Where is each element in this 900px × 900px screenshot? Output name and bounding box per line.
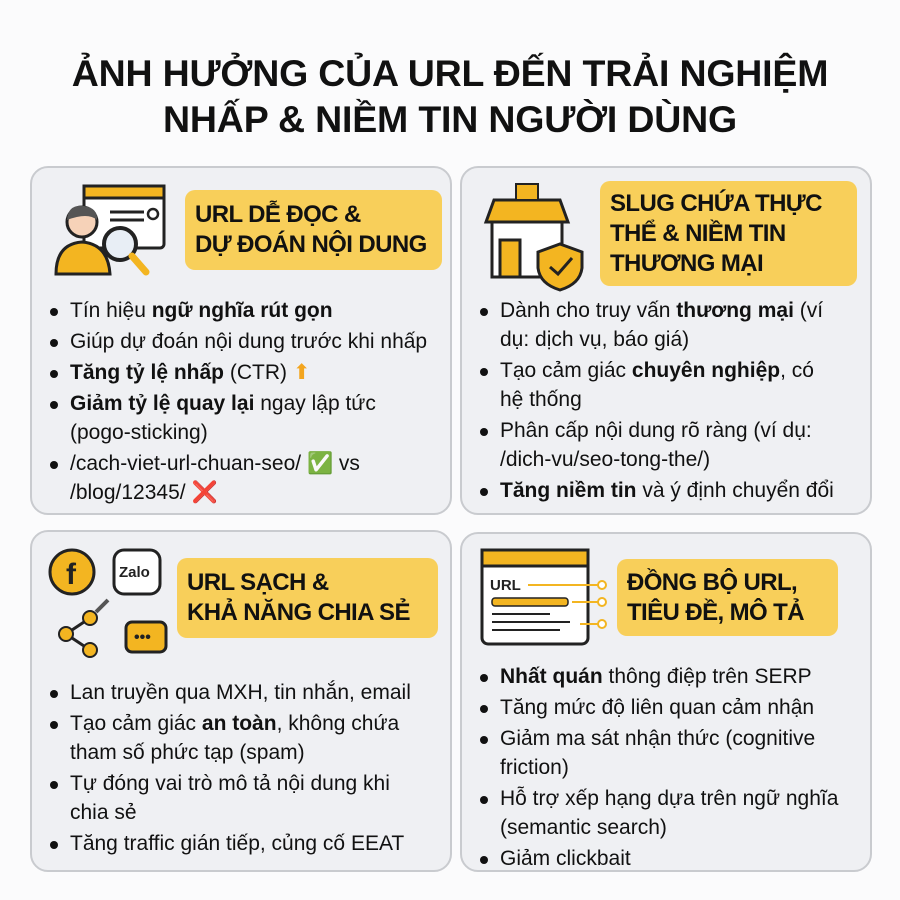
icon: social sharing xyxy=(48,548,168,658)
bullets: Tăng tỷ lệ nhấp (CTR) ⬆ xyxy=(70,361,310,384)
title: NHẤP & NIỀM TIN NGƯỜI DÙNG xyxy=(163,98,737,140)
bullets: Tăng traffic gián tiếp, củng cố EEAT xyxy=(70,832,404,855)
bullets: /cach-viet-url-chuan-seo/ ✅ vs xyxy=(70,452,360,475)
bullets: Phân cấp nội dung rõ ràng (ví dụ: xyxy=(500,419,812,442)
icon: browser with URL links xyxy=(480,548,607,646)
bullets: Giảm tỷ lệ quay lại ngay lập tức xyxy=(70,392,376,415)
bullets: Nhất quán thông điệp trên SERP xyxy=(500,665,812,688)
icon: store with shield xyxy=(484,183,584,292)
icon: person with magnifier xyxy=(54,184,166,276)
panel: readable URL xyxy=(30,166,452,515)
heading: DỰ ĐOÁN NỘI DUNG xyxy=(195,231,427,258)
bullets: Tăng niềm tin và ý định chuyển đổi xyxy=(500,479,834,502)
title xyxy=(72,52,828,140)
bullets: Tín hiệu ngữ nghĩa rút gọn xyxy=(70,299,333,322)
heading: THỂ & NIỀM TIN xyxy=(610,220,786,246)
panel: URL title description sync xyxy=(460,532,872,872)
bullets xyxy=(50,680,411,855)
title: ẢNH HƯỞNG CỦA URL ĐẾN TRẢI NGHIỆM xyxy=(72,52,828,94)
heading: ĐỒNG BỘ URL, xyxy=(627,568,797,596)
bullets: Tạo cảm giác chuyên nghiệp, có xyxy=(500,359,814,382)
bullets xyxy=(50,299,427,504)
bullets: chia sẻ xyxy=(70,801,137,824)
heading: URL SẠCH & xyxy=(187,569,329,596)
bullets: Tự đóng vai trò mô tả nội dung khi xyxy=(70,772,390,795)
heading: KHẢ NĂNG CHIA SẺ xyxy=(187,599,410,626)
bullets: Giảm ma sát nhận thức (cognitive xyxy=(500,727,815,750)
bullets: Dành cho truy vấn thương mại (ví xyxy=(500,299,823,322)
bullets: Hỗ trợ xếp hạng dựa trên ngữ nghĩa xyxy=(500,787,838,810)
bullets: friction) xyxy=(500,756,569,779)
bullets: Giảm clickbait xyxy=(500,847,631,870)
heading xyxy=(600,181,857,286)
bullets: Tạo cảm giác an toàn, không chứa xyxy=(70,712,399,735)
heading: URL DỄ ĐỌC & xyxy=(195,201,361,228)
bullets: tham số phức tạp (spam) xyxy=(70,741,305,764)
heading: TIÊU ĐỀ, MÔ TẢ xyxy=(627,598,804,626)
bullets: Tăng mức độ liên quan cảm nhận xyxy=(500,696,814,719)
heading: THƯƠNG MẠI xyxy=(610,250,763,276)
bullets: hệ thống xyxy=(500,388,582,411)
heading: SLUG CHỨA THỰC xyxy=(610,190,822,216)
heading xyxy=(177,558,438,638)
bullets: /dich-vu/seo-tong-the/) xyxy=(500,448,710,471)
heading xyxy=(185,190,442,270)
bullets xyxy=(480,299,834,502)
bullets xyxy=(480,665,838,870)
bullets: dụ: dịch vụ, báo giá) xyxy=(500,328,689,351)
bullets: Giúp dự đoán nội dung trước khi nhấp xyxy=(70,330,427,353)
bullets: Lan truyền qua MXH, tin nhắn, email xyxy=(70,681,411,704)
bullets: (semantic search) xyxy=(500,816,667,839)
bullets: (pogo-sticking) xyxy=(70,421,208,444)
icon: social sharing: ••• xyxy=(134,629,151,646)
heading xyxy=(617,559,838,636)
icon: social sharing: Zalo xyxy=(119,564,150,581)
panel: slug entity xyxy=(460,166,872,515)
icon: browser with URL links: URL xyxy=(490,577,521,594)
panel: clean URL sharing xyxy=(30,530,452,872)
icon: social sharing: f xyxy=(66,558,77,591)
bullets: /blog/12345/ ❌ xyxy=(70,481,218,504)
